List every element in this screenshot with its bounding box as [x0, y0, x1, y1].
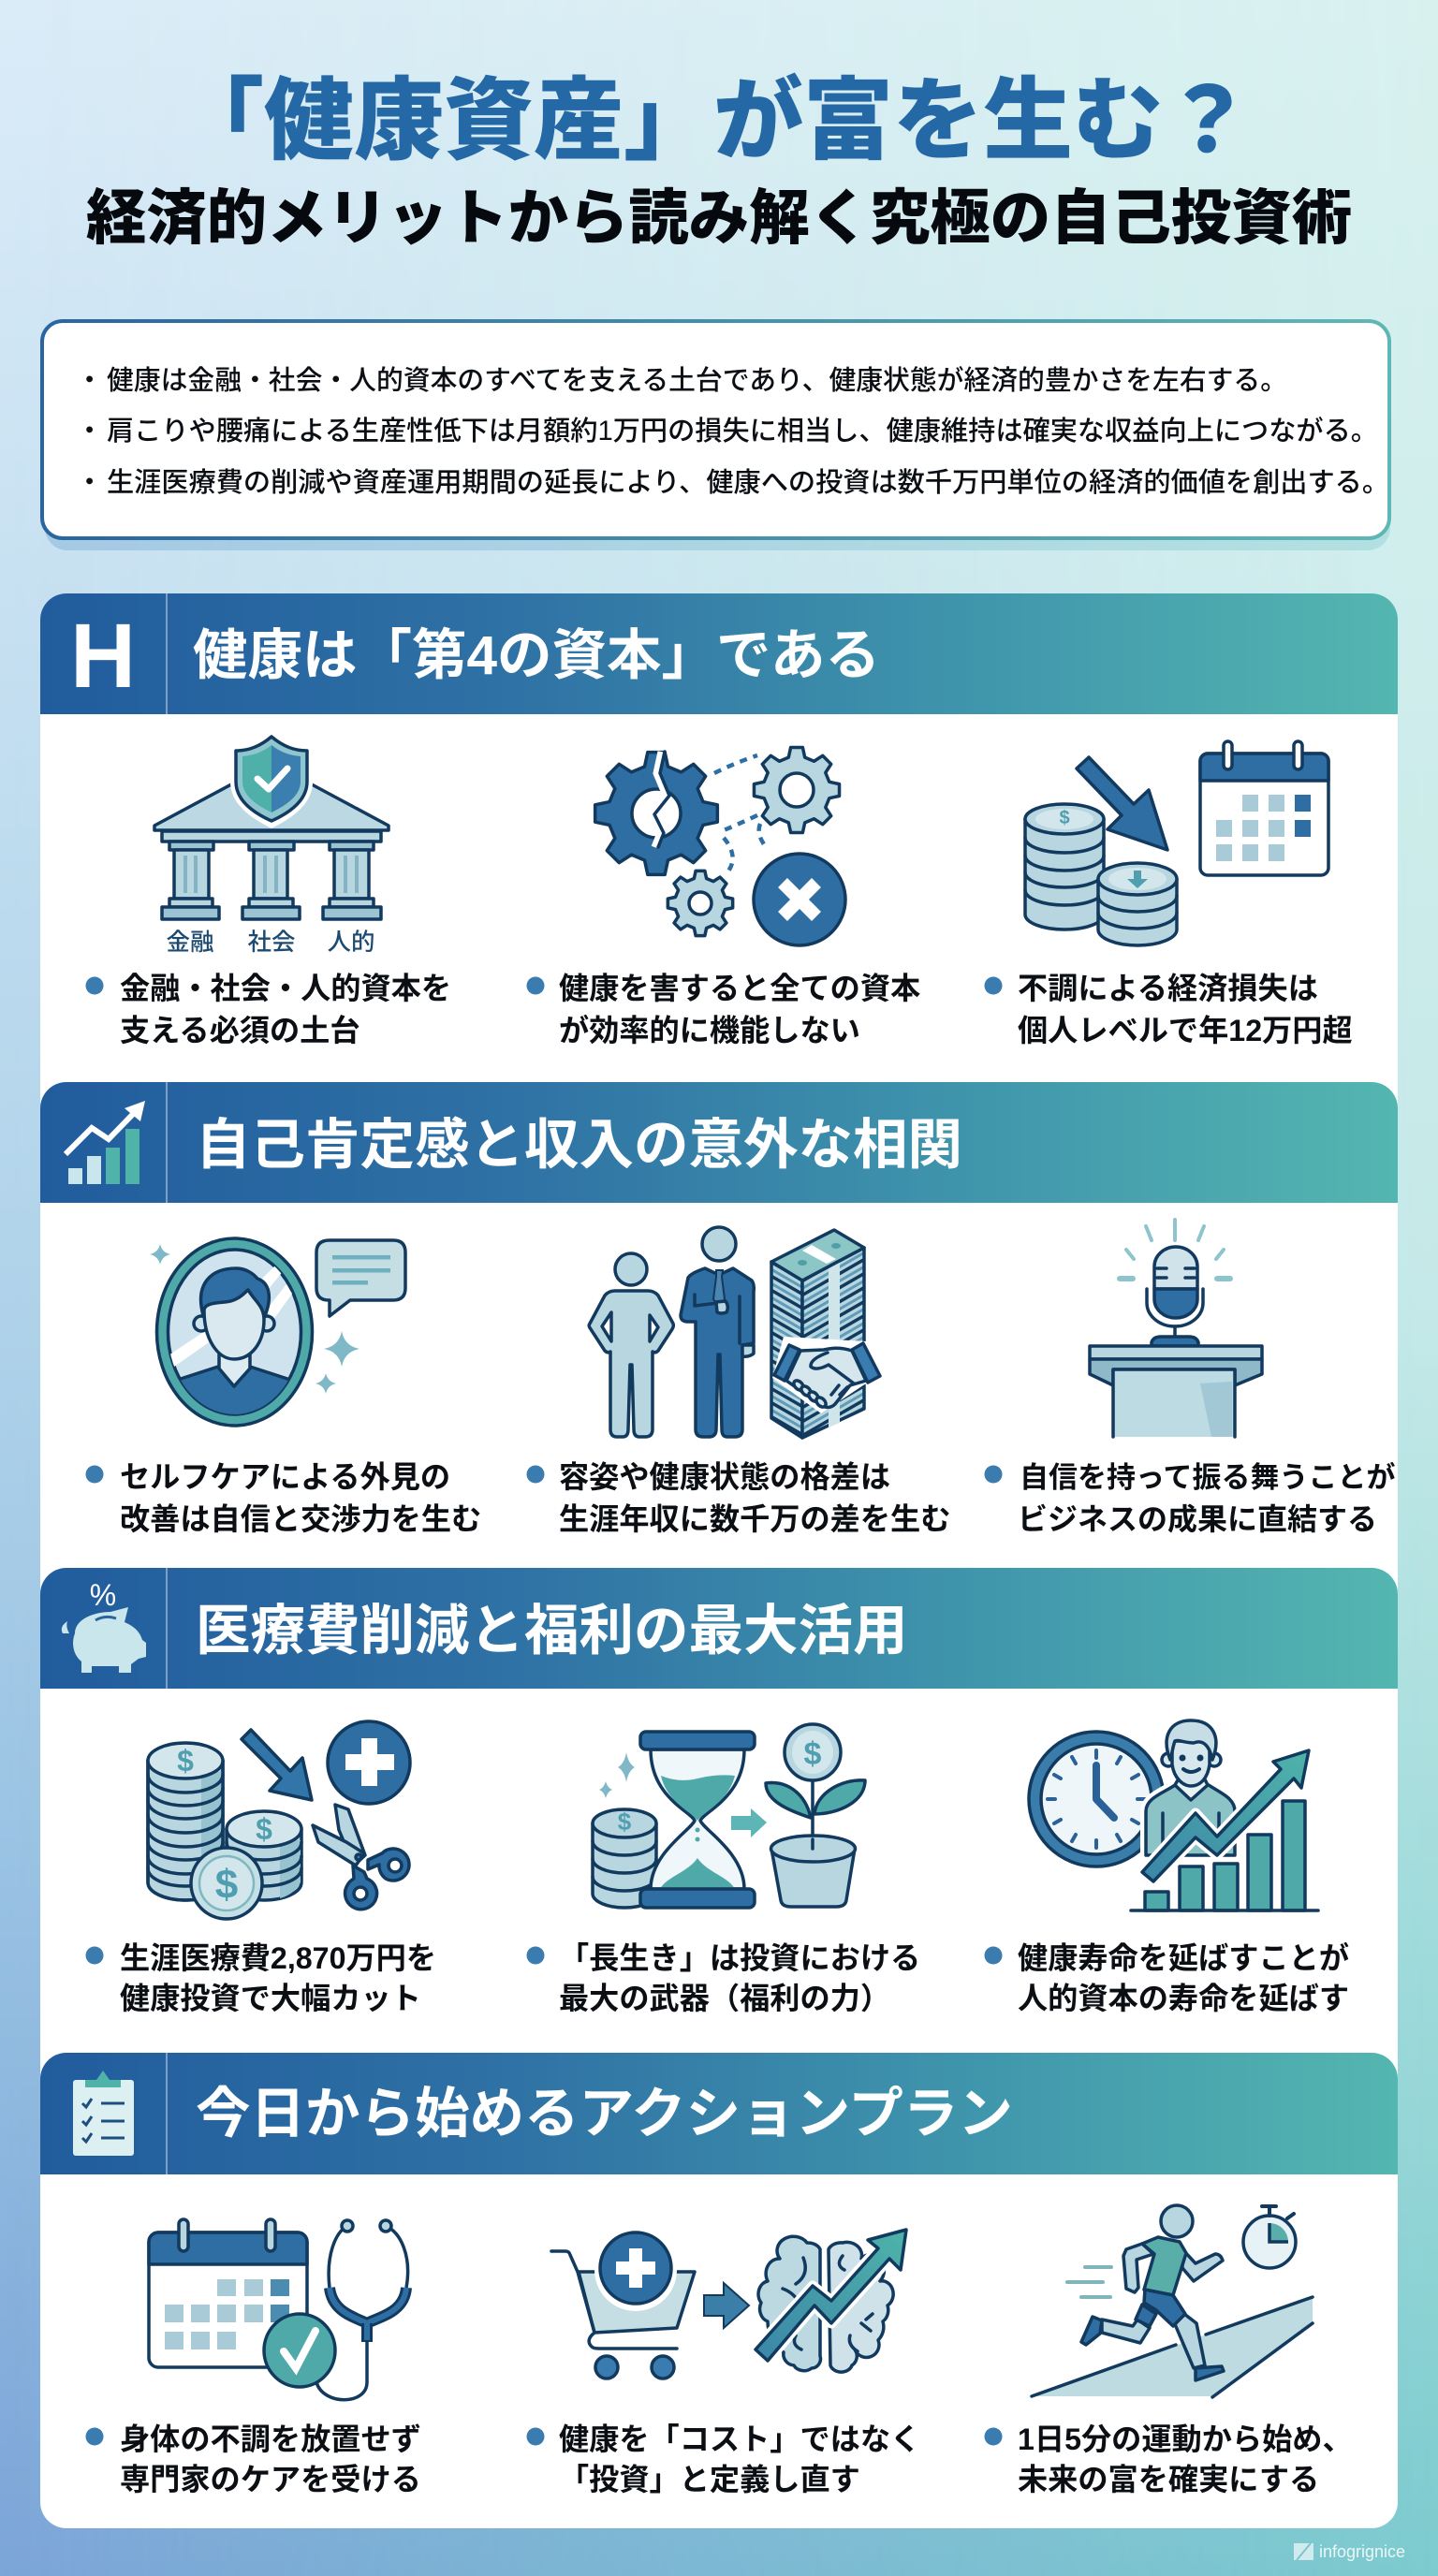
bullet text 1-3 — [985, 972, 1353, 1047]
bullet text 1-1 — [86, 972, 451, 1047]
icon: coins, arrow, plus and scissors: $ — [177, 1744, 194, 1778]
icon: rising bars — [66, 1101, 145, 1184]
section header 3 — [40, 1568, 1398, 1689]
bullet text 4-1 — [86, 2422, 421, 2496]
bullet text 4-1: 専門家のケアを受ける — [120, 2463, 421, 2496]
icon: hourglass, coins and plant: $ — [618, 1808, 632, 1836]
icon: mirror and speech bubble — [150, 1238, 405, 1432]
bullet text 2-1: 改善は自信と交渉力を生む — [120, 1502, 481, 1536]
bullet text 3-2: 「長生き」は投資における — [559, 1941, 920, 1975]
summary line 1: 健康は金融・社会・人的資本のすべてを支える土台であり、健康状態が経済的豊かさを左右する。 — [107, 366, 1287, 396]
bullet text 1-2: が効率的に機能しない — [559, 1014, 860, 1047]
heading: 医療費削減と福利の最大活用 — [196, 1601, 908, 1661]
icon: hourglass, coins and plant: $ — [804, 1736, 822, 1772]
icon: clock, senior person and growth chart — [1029, 1720, 1318, 1910]
panel: 健康は第4の資本 — [40, 593, 1398, 1110]
summary line 3: ・ — [76, 468, 103, 498]
icon: hourglass, coins and plant — [593, 1724, 865, 1908]
subtitle: 経済的メリットから読み解く究極の自己投資術 — [86, 184, 1352, 252]
bullet text 4-3: 未来の富を確実にする — [1018, 2463, 1319, 2496]
panel: summary — [42, 321, 1390, 550]
panel: アクションプラン — [40, 2053, 1398, 2528]
bullet text 1-1: 金融・社会・人的資本を — [120, 972, 451, 1005]
section header 2 — [40, 1082, 1398, 1203]
summary line 2: ・ — [76, 417, 103, 446]
icon: coins, arrow, plus and scissors: $ — [215, 1862, 238, 1908]
icon: coins, arrow, plus and scissors — [148, 1721, 410, 1919]
summary line 2: 肩こりや腰痛による生産性低下は月額約1万円の損失に相当し、健康維持は確実な収益向上につながる。 — [107, 416, 1378, 446]
bullet text 4-3: 1日5分の運動から始め、 — [1018, 2422, 1353, 2456]
bullet text 4-3 — [985, 2422, 1353, 2496]
bullet text 2-2 — [526, 1460, 950, 1536]
watermark: infogrignice — [1319, 2542, 1405, 2561]
bullet text 2-2: 生涯年収に数千万の差を生む — [559, 1502, 950, 1536]
bullet text 2-3: 自信を持って振る舞うことが — [1020, 1461, 1395, 1494]
icon: piggy bank and percent: % — [90, 1578, 116, 1612]
label: 金融: 金融 — [166, 929, 214, 956]
bullet text 4-1: 身体の不調を放置せず — [120, 2422, 421, 2456]
bullet text 1-1: 支える必須の土台 — [120, 1014, 360, 1047]
bullet text 3-3: 健康寿命を延ばすことが — [1018, 1941, 1349, 1975]
icon: two people and money stack handshake — [589, 1227, 880, 1438]
heading: 健康は「第4の資本」である — [193, 625, 880, 686]
bullet text 2-1 — [86, 1460, 481, 1536]
bullet text 4-2: 健康を「コスト」ではなく — [559, 2422, 920, 2456]
icon: bank with shield — [154, 732, 389, 956]
title: 「健康資産」が富を生む？ — [174, 71, 1253, 171]
bullet text 1-3: 個人レベルで年12万円超 — [1018, 1014, 1353, 1047]
icon: piggy bank and percent — [62, 1578, 146, 1673]
bullet text 3-1 — [86, 1941, 436, 2015]
bullet text 2-1: セルフケアによる外見の — [120, 1460, 450, 1494]
bullet text 1-2: 健康を害すると全ての資本 — [559, 972, 920, 1005]
bullet text 2-2: 容姿や健康状態の格差は — [559, 1460, 890, 1494]
bullet text 3-2 — [526, 1941, 920, 2015]
bullet text 3-3: 人的資本の寿命を延ばす — [1018, 1982, 1349, 2015]
panel: 自己肯定感と収入 — [40, 1082, 1398, 1597]
bullet text 4-2 — [526, 2422, 920, 2496]
icon: shopping cart, arrow and brain — [551, 2229, 906, 2378]
bullet text 3-2: 最大の武器（福利の力） — [559, 1982, 890, 2015]
label: 人的: 人的 — [327, 929, 375, 956]
heading: 自己肯定感と収入の意外な相関 — [196, 1115, 962, 1176]
bullet text 4-2: 「投資」と定義し直す — [559, 2463, 860, 2496]
label: 社会: 社会 — [247, 929, 296, 956]
bullet text 3-3 — [985, 1941, 1349, 2015]
icon: H: H — [70, 605, 136, 707]
section header 1 — [40, 593, 1398, 714]
bullet text 1-2 — [526, 972, 920, 1047]
summary line 3: 生涯医療費の削減や資産運用期間の延長により、健康への投資は数千万円単位の経済的価値を創出する。 — [107, 467, 1389, 498]
bullet text 2-3 — [985, 1461, 1395, 1536]
bullet text 1-3: 不調による経済損失は — [1018, 972, 1318, 1005]
icon: clipboard checklist — [73, 2071, 134, 2156]
icon: coins, arrow, plus and scissors: $ — [256, 1812, 272, 1846]
icon: podium with microphone — [1090, 1220, 1262, 1437]
bullet text 3-1: 健康投資で大幅カット — [120, 1982, 421, 2015]
icon: broken gears — [595, 747, 845, 945]
bullet text 3-1: 生涯医療費2,870万円を — [120, 1941, 436, 1975]
icon: runner on road with stopwatch — [1032, 2205, 1313, 2397]
summary line 1: ・ — [76, 366, 103, 396]
panel: 医療費削減と福利 — [40, 1568, 1398, 2081]
bullet text 2-3: ビジネスの成果に直結する — [1018, 1502, 1377, 1536]
icon: falling coins and calendar: $ — [1059, 808, 1070, 828]
heading: 今日から始めるアクションプラン — [196, 2084, 1013, 2144]
section header 4 — [40, 2053, 1398, 2174]
icon: falling coins and calendar — [1025, 741, 1328, 945]
icon: calendar and stethoscope — [149, 2219, 408, 2400]
